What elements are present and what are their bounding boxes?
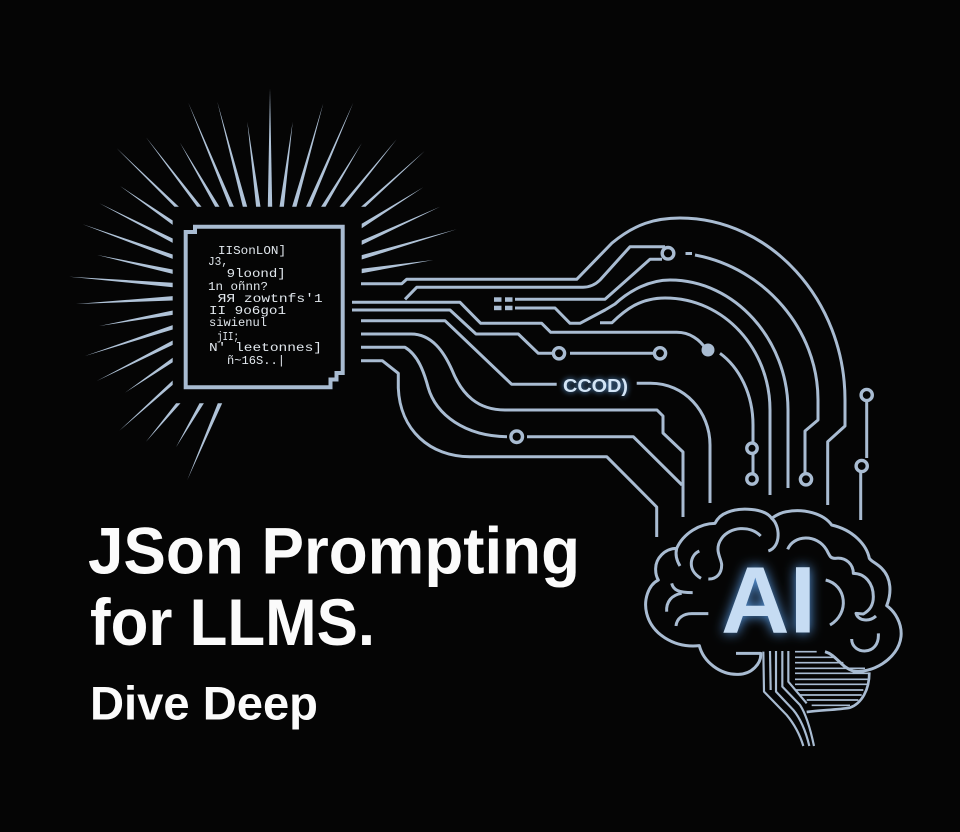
label: CCOD glowing tag: CCOD) — [563, 376, 628, 396]
trace K — [361, 361, 657, 537]
title — [88, 513, 580, 659]
small square pads — [494, 297, 512, 310]
icon: brain outline — [646, 509, 901, 674]
icon: radiating light rays around chip — [69, 88, 457, 480]
label: CCOD glowing tag: CCOD) — [563, 376, 628, 396]
trace A: outer arc — [361, 218, 845, 505]
trace G — [352, 310, 552, 353]
chip code text: 9loond] — [227, 267, 286, 281]
chip code text: ЯЯ zowtnfs'1 — [218, 292, 323, 306]
trace J — [361, 347, 507, 437]
chip frame — [186, 227, 343, 387]
chip code text: 1n oñnn? — [208, 280, 268, 294]
icon: cerebellum and brain stem — [763, 651, 869, 746]
chip code text: ñ~16S..| — [227, 354, 285, 368]
trace E — [600, 298, 770, 495]
trace H — [361, 321, 557, 384]
chip code text: IISonLON] — [218, 244, 286, 258]
chip code text — [208, 244, 323, 368]
label: AI glowing letters: AI — [721, 548, 816, 654]
chip code text: II 9o6go1 — [209, 304, 286, 318]
label: AI glowing letters: AI — [721, 548, 816, 654]
trace D — [515, 280, 788, 488]
title: JSon Prompting — [88, 513, 580, 587]
chip code text: siwienul — [209, 316, 267, 330]
trace F — [352, 302, 706, 349]
subtitle: Dive Deep — [90, 676, 318, 729]
chip code text: J3, — [208, 255, 228, 269]
trace I — [361, 334, 683, 517]
circuit traces from chip to brain — [352, 218, 872, 537]
chip code text: jII; — [217, 330, 239, 344]
right side nodes — [865, 401, 868, 458]
trace B: node loop — [405, 247, 665, 299]
chip code text: N' leetonnes] — [209, 341, 322, 355]
title: for LLMS. — [90, 585, 375, 659]
icon: JSON chip — [186, 227, 343, 387]
